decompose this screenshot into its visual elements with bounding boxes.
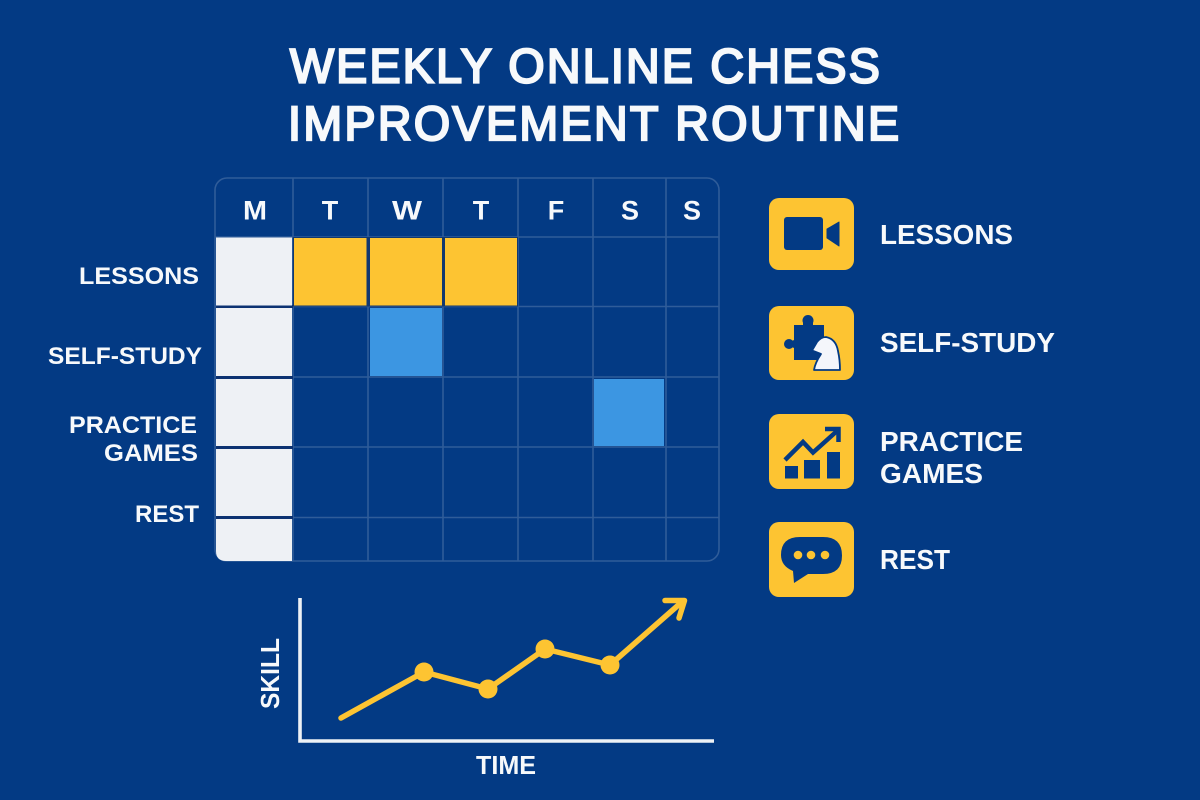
- blue self-study cells: [370, 308, 664, 446]
- row labels: [48, 263, 202, 528]
- row labels: LESSONS: [79, 263, 199, 290]
- row labels: GAMES: [104, 440, 198, 467]
- legend: practice games: GAMES: [880, 458, 983, 489]
- icon: rising bar chart: [769, 414, 854, 489]
- panel: weekly schedule grid: [215, 178, 719, 561]
- legend: lessons: [769, 198, 1013, 270]
- day headers: F: [548, 196, 564, 226]
- legend: practice games: [769, 414, 1023, 489]
- day headers: W: [392, 196, 423, 226]
- legend: practice games: PRACTICE: [880, 426, 1023, 457]
- icon: speech bubble: [769, 522, 854, 597]
- icon: video camera: [769, 198, 854, 270]
- legend: rest: [769, 522, 950, 597]
- legend: rest: REST: [880, 544, 950, 575]
- day headers: S: [621, 196, 639, 226]
- grid background: [215, 178, 719, 561]
- Monday rest column cells: [216, 238, 293, 561]
- yellow lesson cells: [293, 237, 518, 306]
- legend: lessons: LESSONS: [880, 219, 1013, 250]
- row labels: PRACTICE: [69, 412, 197, 439]
- axes: [300, 598, 714, 741]
- title: [288, 40, 899, 151]
- row labels: REST: [135, 501, 199, 528]
- axis label: time: TIME: [476, 750, 536, 780]
- row labels: SELF-STUDY: [48, 343, 202, 370]
- title: WEEKLY ONLINE CHESS: [290, 40, 880, 94]
- axis label: skill: SKILL: [255, 638, 285, 709]
- legend: self-study: [769, 306, 1055, 380]
- icon: puzzle piece and chess knight: [769, 306, 854, 380]
- day headers: S: [683, 196, 701, 226]
- chart: skill over time: [255, 598, 714, 780]
- day headers: [243, 196, 701, 226]
- day headers: T: [473, 196, 490, 226]
- skill trend line: [341, 600, 684, 718]
- legend: self-study: SELF-STUDY: [880, 327, 1055, 358]
- title: IMPROVEMENT ROUTINE: [288, 97, 899, 151]
- day headers: T: [322, 196, 339, 226]
- day headers: M: [243, 196, 267, 226]
